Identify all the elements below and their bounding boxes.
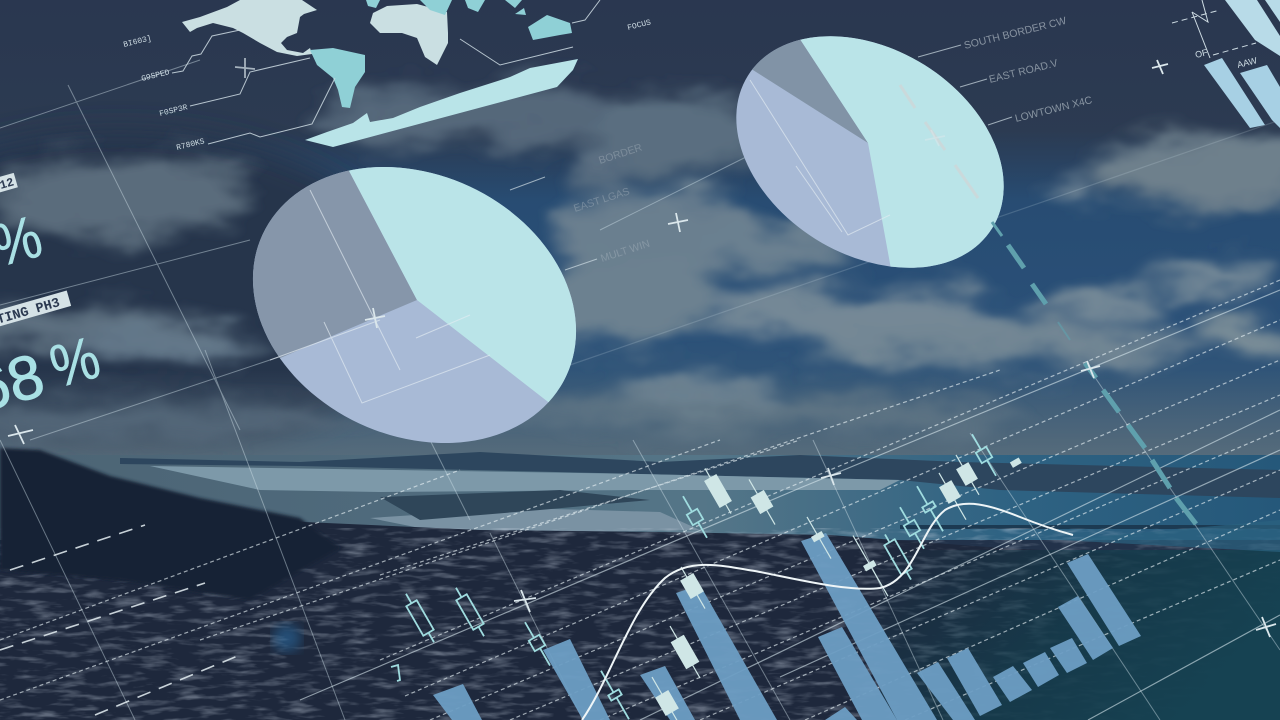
map callout lines xyxy=(172,0,600,144)
diagonal segmented line xyxy=(900,85,1196,524)
pie labels: small pie: SOUTH BORDER CW xyxy=(963,15,1068,52)
pie overlay lines xyxy=(270,80,890,403)
candlesticks: filled xyxy=(646,452,1021,720)
background: dark hill xyxy=(0,448,340,600)
pie labels: small pie xyxy=(918,15,1094,125)
label: OF: OF xyxy=(1194,47,1209,60)
map: africa xyxy=(370,4,448,65)
background: city xyxy=(0,520,1280,720)
bar chart xyxy=(433,533,1141,720)
map labels: FOCUS xyxy=(627,18,652,33)
world map xyxy=(182,0,578,147)
pie chart: large xyxy=(252,167,576,443)
line chart: white curve xyxy=(582,504,1073,720)
upper right bars xyxy=(1172,0,1280,128)
pie labels: large pie xyxy=(510,141,651,270)
map: north america xyxy=(182,0,317,56)
pie labels: large pie: MULT WIN xyxy=(599,238,651,265)
pie labels: small pie: EAST ROAD.V xyxy=(988,57,1059,86)
map: antarctica xyxy=(305,59,578,147)
label: AAW: AAW xyxy=(1236,55,1259,70)
grid: left dashed lines xyxy=(0,525,240,715)
pie labels: small pie: LOWTOWN X4C xyxy=(1014,94,1094,125)
grid: dotted rising lines xyxy=(0,280,1280,720)
background: clouds xyxy=(0,83,1280,438)
map labels: G9SPED xyxy=(141,68,171,84)
map: australia xyxy=(528,15,572,40)
candlesticks: outlined xyxy=(391,431,1001,720)
pie labels: large pie: EAST LGAS xyxy=(572,185,631,215)
left readout: lower xyxy=(0,291,107,426)
map: south america xyxy=(310,48,365,108)
map labels: BI603] xyxy=(123,34,153,50)
map labels: F0SP3R xyxy=(159,103,189,119)
left readout: lower: % xyxy=(43,324,107,401)
map labels: R780KS xyxy=(176,137,206,153)
grid: solid rising lines xyxy=(300,120,1280,720)
background: sky xyxy=(0,0,1280,470)
tag: lower xyxy=(0,291,72,330)
map: eurasia fragments xyxy=(366,0,526,15)
cross markers xyxy=(8,58,1276,637)
lens flare xyxy=(273,624,301,652)
background: sea and distant hills xyxy=(0,452,1280,540)
left readout: upper xyxy=(0,173,49,280)
map labels xyxy=(123,18,652,153)
pie chart: small xyxy=(736,36,1004,268)
pie labels: large pie: BORDER xyxy=(597,141,644,167)
